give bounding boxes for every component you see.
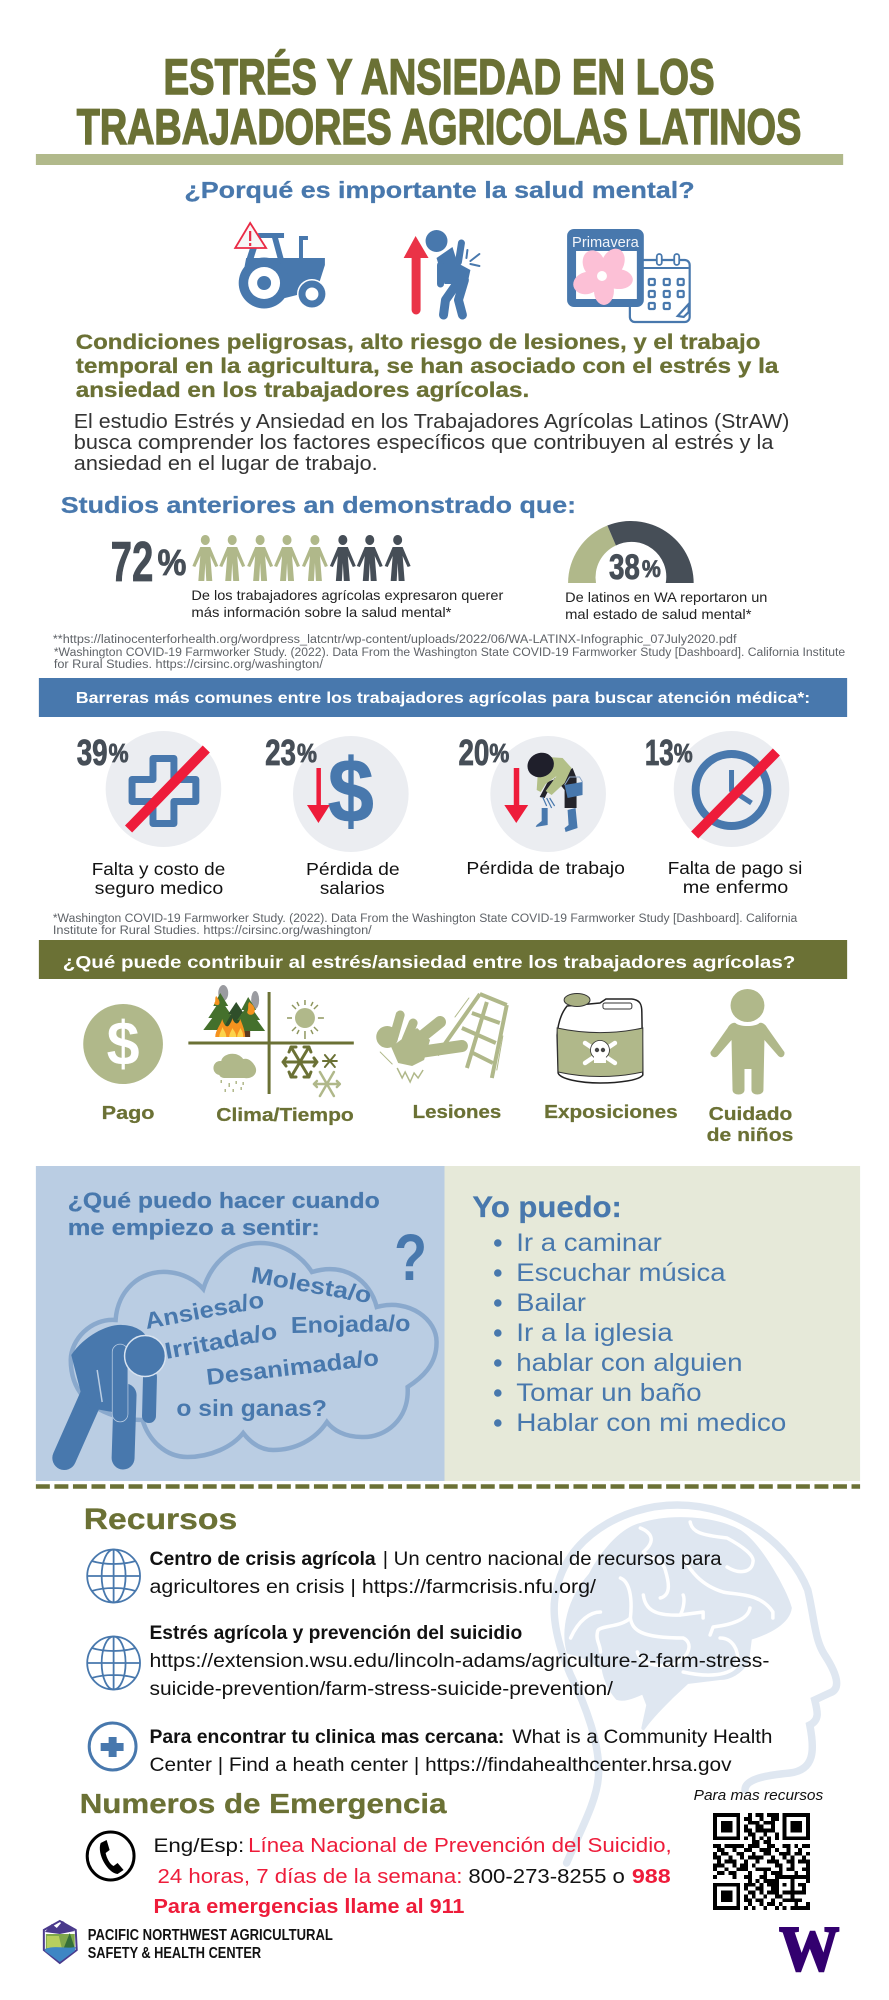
- caption: 72 percent: [191, 587, 504, 620]
- illustration: head with brain: [554, 1505, 837, 1863]
- text block: StrAW study description: [74, 411, 789, 475]
- emergency hotline text: 988: [632, 1866, 671, 1888]
- text block: StrAW study description: ansiedad en el lugar de trabajo.: [74, 453, 378, 475]
- list of coping actions: Ir a caminar: [516, 1229, 662, 1257]
- resource: farm stress and suicide prevention: https://extension.wsu.edu/lincoln-adams/agriculture-2-farm-stress-: [149, 1651, 769, 1672]
- organization name: SAFETY & HEALTH CENTER: [88, 1945, 261, 1962]
- banner: barriers: [39, 678, 847, 717]
- heading: resources: Recursos: [84, 1503, 237, 1536]
- factor: pay: [83, 1004, 163, 1123]
- panel: how I feel: [36, 1166, 444, 1481]
- caption: 38 percent: mal estado de salud mental*: [565, 606, 752, 622]
- icon: snowflakes: [283, 1047, 340, 1096]
- list of coping actions: hablar con alguien: [516, 1349, 742, 1377]
- reference: barriers: [53, 911, 798, 937]
- emergency hotline text: Eng/Esp:: [153, 1836, 244, 1857]
- resource: crisis center: [149, 1549, 722, 1598]
- caption: 38 percent: De latinos en WA reportaron un: [565, 589, 767, 605]
- references: for Rural Studies. https://cirsinc.org/washington/: [54, 657, 324, 671]
- chart: 38 percent half donut: %: [642, 556, 661, 583]
- resource: nearest clinic: Center | Find a heath center | https://findahealthcenter.hrsa.gov: [149, 1755, 732, 1776]
- icon: thought cloud: [71, 1243, 437, 1457]
- resource: farm stress and suicide prevention: suicide-prevention/farm-stress-suicide-prevention/: [149, 1679, 614, 1700]
- heading: emergency numbers: Numeros de Emergencia: [80, 1788, 447, 1819]
- panel: how I feel: ¿Qué puedo hacer cuando: [68, 1188, 380, 1213]
- resource: nearest clinic: What is a Community Health: [512, 1727, 772, 1748]
- caption: 38 percent: [565, 589, 767, 622]
- emergency hotline text: Línea Nacional de Prevención del Suicidio,: [248, 1835, 672, 1857]
- logo: University of Washington W: W: [779, 1913, 839, 1984]
- icon: red up arrow: [404, 236, 429, 315]
- factor: injuries: Lesiones: [413, 1101, 501, 1122]
- logo: Pacific Northwest shield: [44, 1921, 77, 1963]
- references: **https://latinocenterforhealth.org/wordpress_latcntr/wp-content/uploads/2022/06/WA-LATINX-Infographic_07July2020.pdf: [53, 632, 737, 646]
- panel: I can: Yo puedo:: [472, 1191, 622, 1224]
- factor: childcare: [707, 989, 793, 1145]
- resource: crisis center: Centro de crisis agrícola: [149, 1549, 376, 1570]
- feelings words: Molesta/o: [249, 1261, 374, 1308]
- factor: weather: Clima/Tiempo: [216, 1104, 354, 1125]
- barrier: lost wages 23 percent: %: [297, 740, 317, 768]
- resource: crisis center: agricultores en crisis | https://farmcrisis.nfu.org/: [149, 1577, 597, 1598]
- barrier: job loss 20 percent: 20: [458, 732, 489, 773]
- emergency hotline text: [153, 1835, 672, 1918]
- factor: chemical exposure: [544, 994, 678, 1122]
- title: [77, 49, 801, 155]
- list of coping actions: Escuchar música: [516, 1259, 726, 1287]
- references: *Washington COVID-19 Farmworker Study. (2022). Data From the Washington State COVID-19 Farmworker Study [Dashboard]. California Institute: [54, 645, 845, 659]
- label: more resources: Para mas recursos: [694, 1788, 823, 1804]
- factor: pay: Pago: [102, 1102, 154, 1123]
- barrier: no sick pay 13 percent: [645, 731, 802, 897]
- pictogram: 5 of 8 people: [192, 535, 411, 581]
- factor: childcare: de niños: [707, 1124, 793, 1145]
- organization name: [88, 1927, 333, 1962]
- banner: contributors: [39, 940, 847, 979]
- barrier: insurance 39 percent: 39: [77, 732, 108, 773]
- barrier: insurance 39 percent: [77, 731, 225, 898]
- panel: how I feel: me empiezo a sentir:: [68, 1215, 320, 1240]
- reference: barriers: *Washington COVID-19 Farmworker Study. (2022). Data From the Washington State COVID-19 Farmworker Study [Dashboard]. California: [53, 911, 798, 925]
- text block: hazardous conditions statement: temporal en la agricultura, se han asociado con el estrés y la: [76, 355, 779, 378]
- text block: hazardous conditions statement: ansiedad en los trabajadores agrícolas.: [76, 379, 529, 402]
- panel: I can: [444, 1166, 860, 1481]
- text block: hazardous conditions statement: Condiciones peligrosas, alto riesgo de lesiones, y el trabajo: [76, 331, 760, 354]
- icon: phone: [87, 1832, 134, 1880]
- barrier: lost wages 23 percent: salarios: [320, 878, 385, 898]
- icon: stressed person: [64, 1325, 165, 1458]
- icon: worker with back pain: [426, 230, 479, 315]
- emergency hotline text: Para emergencias llame al 911: [153, 1896, 464, 1918]
- barrier: lost wages 23 percent: Pérdida de: [306, 859, 400, 879]
- icon: rain cloud: [213, 1054, 256, 1092]
- chart: 38 percent half donut: [568, 521, 694, 587]
- caption: 72 percent: De los trabajadores agrícolas expresaron querer: [191, 587, 504, 603]
- icon: sun: [287, 1000, 324, 1039]
- barrier: no sick pay 13 percent: Falta de pago si: [668, 858, 802, 878]
- QR code: [713, 1815, 810, 1908]
- icon: question mark: ?: [394, 1220, 427, 1294]
- barrier: no sick pay 13 percent: 13: [645, 732, 674, 773]
- resource: farm stress and suicide prevention: [149, 1623, 769, 1700]
- barrier: insurance 39 percent: %: [109, 740, 129, 768]
- barrier: lost wages 23 percent: 23: [265, 732, 296, 773]
- list of coping actions: Tomar un baño: [516, 1379, 702, 1407]
- barrier: no sick pay 13 percent: %: [674, 740, 693, 768]
- barrier: job loss 20 percent: %: [489, 740, 509, 768]
- reference: barriers: Institute for Rural Studies. https://cirsinc.org/washington/: [53, 923, 372, 937]
- factor: injuries: [376, 994, 507, 1122]
- barrier: job loss 20 percent: Pérdida de trabajo: [466, 858, 625, 878]
- icon: tractor with warning: [235, 223, 327, 309]
- resource: nearest clinic: [149, 1727, 772, 1776]
- list of coping actions: Ir a la iglesia: [516, 1319, 673, 1347]
- icon: seasonal calendar: [567, 229, 690, 322]
- barrier: lost wages 23 percent: $: [328, 742, 374, 842]
- factor: weather: [188, 985, 354, 1125]
- barrier: insurance 39 percent: seguro medico: [95, 878, 223, 898]
- title rule: [36, 154, 843, 165]
- references: [53, 632, 845, 671]
- text block: hazardous conditions statement: [76, 331, 779, 402]
- caption: 72 percent: más información sobre la salud mental*: [191, 604, 452, 620]
- feelings words: o sin ganas?: [176, 1395, 327, 1421]
- organization name: PACIFIC NORTHWEST AGRICULTURAL: [88, 1927, 333, 1944]
- chart: 38 percent half donut: 38: [609, 548, 640, 587]
- barrier: lost wages 23 percent: [265, 732, 409, 898]
- icon: globe: [87, 1550, 140, 1602]
- barrier: no sick pay 13 percent: me enfermo: [683, 877, 788, 897]
- feelings words: Enojada/o: [291, 1310, 411, 1338]
- icon: bending farmer: [523, 748, 583, 832]
- resource: farm stress and suicide prevention: Estrés agrícola y prevención del suicidio: [149, 1623, 522, 1644]
- emergency hotline text: 24 horas, 7 días de la semana:: [157, 1866, 462, 1888]
- factor: childcare: Cuidado: [709, 1103, 792, 1124]
- icon: seasonal calendar: Primavera: [572, 235, 640, 251]
- icon: globe: [87, 1636, 140, 1690]
- list of coping actions: [494, 1229, 786, 1437]
- icon: health plus: [89, 1723, 136, 1770]
- barrier: insurance 39 percent: Falta y costo de: [92, 859, 225, 879]
- stat: 72 percent: %: [157, 542, 186, 583]
- heading: why mental health matters: ¿Porqué es importante la salud mental?: [184, 177, 695, 203]
- banner: barriers: Barreras más comunes entre los trabajadores agrícolas para buscar atención médica*:: [76, 690, 810, 707]
- feelings words: Desanimada/o: [205, 1344, 380, 1390]
- barrier: job loss 20 percent: [458, 732, 625, 878]
- heading: previous studies: Studios anteriores an demonstrado que:: [61, 492, 576, 518]
- emergency hotline text: 800-273-8255 o: [468, 1866, 625, 1888]
- resource: crisis center: | Un centro nacional de recursos para: [383, 1549, 722, 1570]
- feelings words: Ansiesa/o: [143, 1286, 266, 1334]
- text block: StrAW study description: busca comprender los factores específicos que contribuyen al estrés y la: [74, 432, 774, 454]
- text block: StrAW study description: El estudio Estrés y Ansiedad en los Trabajadores Agrícolas Latinos (StrAW): [74, 411, 789, 433]
- icon: forest fire: [203, 985, 265, 1037]
- banner: contributors: ¿Qué puede contribuir al estrés/ansiedad entre los trabajadores agrícolas?: [63, 952, 795, 972]
- stat: 72 percent: 72: [111, 530, 153, 594]
- factor: chemical exposure: Exposiciones: [544, 1101, 678, 1122]
- list of coping actions: Bailar: [516, 1289, 586, 1317]
- factor: pay: $: [107, 1010, 140, 1079]
- title: ESTRÉS Y ANSIEDAD EN LOS: [163, 49, 715, 105]
- list of coping actions: Hablar con mi medico: [516, 1409, 786, 1437]
- feelings words: Irritada/o: [163, 1318, 279, 1364]
- resource: nearest clinic: Para encontrar tu clinica mas cercana:: [149, 1727, 504, 1748]
- feelings words: [143, 1261, 411, 1421]
